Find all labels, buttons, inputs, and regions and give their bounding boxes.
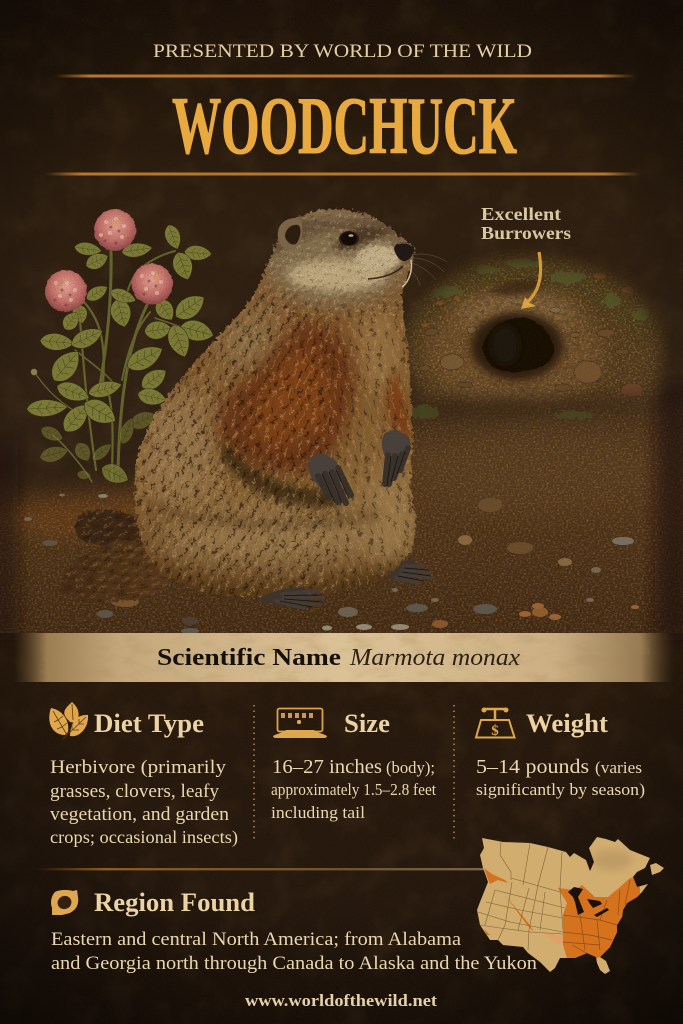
header: presented by: PRESENTED BY WORLD OF THE WILD: [153, 41, 532, 62]
scientific name text: Scientific Name: [157, 645, 341, 671]
scientific name text: Marmota monax: [349, 645, 520, 671]
stones: [24, 494, 639, 634]
heading: Weight: [526, 709, 608, 738]
clover flowers: [45, 209, 172, 312]
lower title rule: [45, 172, 640, 176]
woodchuck: [58, 200, 447, 610]
callout: Excellent Burrowers: Burrowers: [481, 223, 571, 243]
callout: Excellent Burrowers: [481, 204, 571, 243]
head shading: [263, 205, 407, 305]
column divider: [253, 705, 255, 840]
hind feet: [257, 558, 431, 608]
top rule: [55, 74, 635, 78]
body text: [476, 757, 645, 799]
moss: [431, 259, 649, 321]
whiskers: [407, 254, 447, 286]
body text: approximately 1.5–2.8 feet: [271, 780, 436, 799]
rocks: [419, 307, 645, 398]
body text: (varies: [595, 758, 642, 777]
great lakes: [568, 887, 609, 917]
body text: (body);: [386, 758, 435, 777]
arrow to burrow: [521, 252, 541, 309]
ear: [278, 218, 302, 250]
rust chest: [217, 320, 355, 474]
front paws: [308, 431, 410, 503]
icon: weight: [476, 708, 514, 739]
body text: crops; occasional insects): [50, 827, 238, 848]
belly crease shadow: [220, 440, 340, 508]
body text: [271, 757, 436, 822]
leaves: [74, 241, 102, 257]
illustration scene: [0, 200, 683, 640]
tail: [58, 510, 170, 602]
body text: Eastern and central North America; from Alabama: [51, 929, 462, 950]
panel: region found: [51, 888, 538, 974]
stems: [35, 251, 190, 482]
body text: [51, 929, 538, 974]
body text: vegetation, and garden: [50, 804, 230, 825]
icon: region marker: [51, 890, 78, 915]
ground: [0, 380, 683, 640]
icon: weight: $: [491, 723, 499, 739]
clover plant: [26, 209, 216, 488]
body text: and Georgia north through Canada to Alaska and the Yukon: [51, 953, 538, 974]
website: www.worldofthewild.net: [245, 991, 437, 1010]
burrow mound: [403, 249, 672, 420]
heading: Diet Type: [94, 709, 204, 738]
callout: Excellent Burrowers: Excellent: [481, 204, 561, 224]
body text: grasses, clovers, leafy: [50, 781, 220, 802]
nose and mouth: [368, 242, 414, 287]
map grid lines: [478, 842, 565, 950]
heading: Size: [344, 709, 390, 738]
heading: Region Found: [94, 888, 256, 917]
light flanks: [140, 390, 220, 510]
eye: [339, 231, 359, 246]
body text: 5–14 pounds: [476, 757, 589, 778]
scientific name text: [157, 645, 520, 671]
panel: diet type: [49, 702, 238, 848]
icon: leaves: [49, 702, 88, 739]
body: [133, 206, 416, 598]
body text: Herbivore (primarily: [50, 757, 227, 778]
burrow hole: [471, 312, 563, 380]
region divider: [36, 868, 486, 870]
scientific name band: [14, 633, 674, 682]
body text: including tail: [271, 803, 365, 822]
panel: weight: [476, 708, 645, 799]
body text: significantly by season): [476, 780, 645, 799]
column divider: [453, 705, 455, 840]
body text: [50, 757, 238, 848]
fur strokes: [120, 290, 330, 610]
map: North America range: [477, 837, 664, 974]
body text: 16–27 inches: [272, 757, 382, 778]
orange range: [558, 877, 640, 958]
grass patches near mound: [411, 405, 593, 419]
panel: size: [271, 708, 436, 822]
icon: scale: [273, 708, 327, 738]
